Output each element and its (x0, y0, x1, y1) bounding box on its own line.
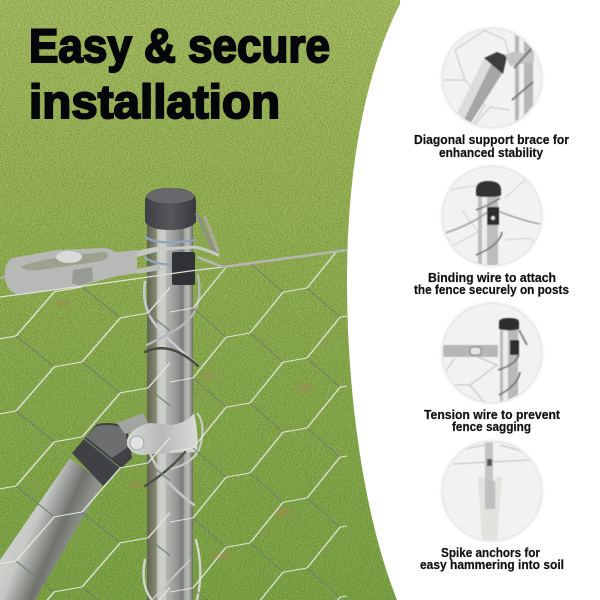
brace end cap (72, 423, 132, 486)
title (29, 19, 330, 128)
upper binding wires (144, 237, 199, 366)
circle photo 4 (442, 441, 542, 541)
detail 1: diagonal brace (414, 28, 569, 160)
caption 1: Diagonal support brace for (414, 133, 569, 147)
lower binding wires (144, 452, 200, 600)
circle photo 1 (442, 28, 542, 130)
white curved panel (347, 0, 600, 600)
grass background (0, 0, 400, 600)
wire mesh (0, 250, 347, 600)
title: installation (29, 75, 280, 128)
caption 1: enhanced stability (439, 146, 543, 160)
tension wire (197, 250, 347, 267)
caption 3: fence sagging (452, 420, 531, 434)
circle photo 3 (442, 303, 542, 403)
clamp plate and bolt (117, 413, 203, 470)
brace tube (0, 458, 103, 600)
detail 3: tension wire (424, 303, 561, 434)
circle photo 2 (442, 166, 542, 266)
clip fittings and pins (150, 214, 218, 255)
caption 2: the fence securely on posts (414, 283, 569, 297)
black clip (172, 252, 195, 285)
brace cap highlight (86, 425, 128, 458)
wire tensioner strap (0, 246, 160, 295)
detail 2: binding wire (414, 166, 569, 297)
post cap (145, 188, 196, 230)
caption 4: easy hammering into soil (420, 558, 564, 572)
caption 1 (414, 133, 569, 160)
detail 4: spike anchor (420, 441, 564, 572)
caption 2: Binding wire to attach (428, 271, 556, 285)
caption 3: Tension wire to prevent (424, 408, 561, 422)
caption 4 (420, 546, 564, 572)
title: Easy & secure (29, 19, 330, 72)
caption 2 (414, 271, 569, 297)
caption 4: Spike anchors for (441, 546, 540, 560)
fence post (147, 225, 193, 600)
caption 3 (424, 408, 561, 434)
